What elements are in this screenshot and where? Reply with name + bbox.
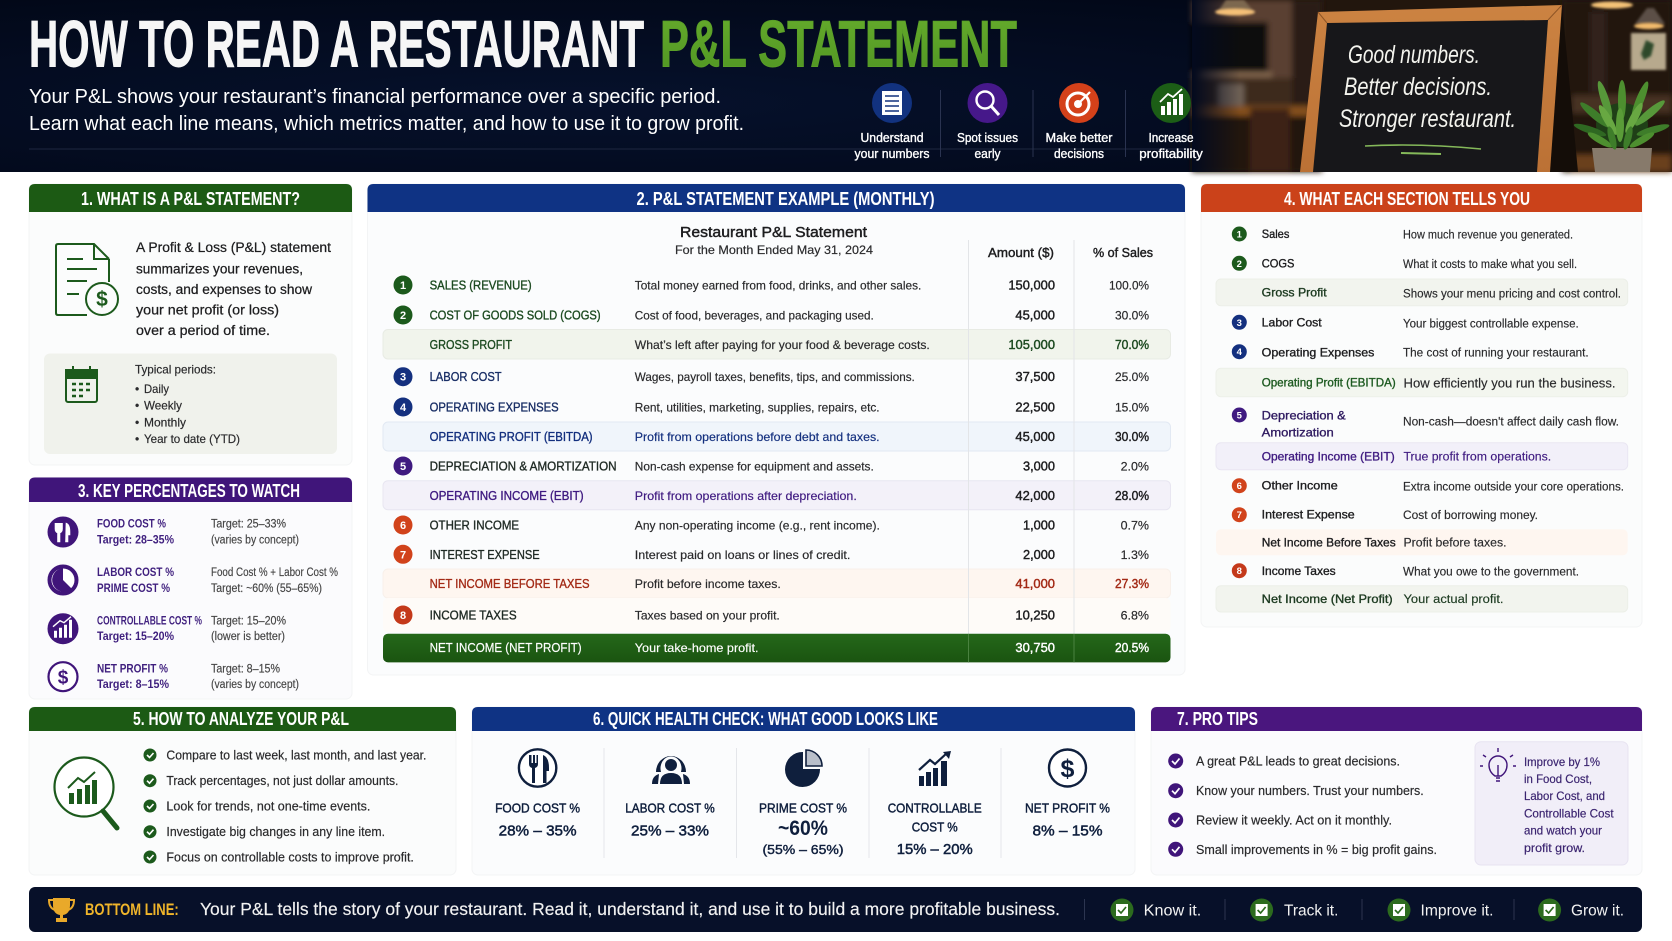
row: operating profit: 30.0% [1115, 430, 1149, 444]
heading [472, 707, 1135, 731]
item: operating income [1262, 450, 1551, 464]
item: other income [1232, 478, 1624, 493]
benefit: understand your numbers: your numbers [854, 147, 930, 161]
metric: prime cost: (55% – 65%) [762, 842, 844, 857]
row: operating expenses: 22,500 [1015, 400, 1055, 414]
item: operating profit [1262, 376, 1616, 390]
item: gross profit [1262, 286, 1621, 300]
row: operating income: OPERATING INCOME (EBIT) [430, 489, 584, 503]
item: sales: 1 [1237, 230, 1243, 240]
item: cogs: 2 [1237, 259, 1242, 270]
item: gross profit: Gross Profit [1262, 286, 1327, 300]
item: interest expense: Cost of borrowing money. [1403, 510, 1538, 522]
row: net income before taxes: NET INCOME BEFORE TAXES [430, 577, 590, 591]
benefit: understand your numbers: Understand [860, 131, 924, 145]
row: net income before taxes: 27.3% [1115, 577, 1149, 591]
icon: dollar circle [48, 662, 78, 691]
metric: food cost: 28% – 35% [499, 823, 577, 840]
row: net income net profit [383, 634, 1170, 662]
item: other income: 6 [1237, 481, 1242, 492]
panel: 6 quick health check [472, 707, 1135, 875]
icon: potted plant [1573, 80, 1670, 172]
typical periods box: Typical periods: [135, 362, 216, 376]
metric: labor and prime cost: LABOR COST % [97, 567, 174, 579]
typical periods box: Monthly [144, 416, 186, 430]
item: net income before taxes: Net Income Before Taxes [1262, 536, 1396, 550]
action: improve it [1388, 898, 1494, 922]
bottom line label: BOTTOM LINE: [85, 900, 179, 919]
icon: growth bars [919, 751, 951, 786]
row: operating profit: OPERATING PROFIT (EBITDA) [430, 430, 593, 444]
row: operating profit [430, 430, 1149, 444]
row: gross profit: GROSS PROFIT [430, 338, 512, 352]
checklist: Track percentages, not just dollar amounts. [166, 774, 398, 788]
item: operating profit: Operating Profit (EBITDA) [1262, 376, 1396, 390]
item: operating income: True profit from operations. [1404, 452, 1551, 464]
metric: net profit: (varies by concept) [211, 679, 299, 691]
callout: Controllable Cost [1524, 806, 1614, 820]
item: net income before taxes [1262, 536, 1506, 550]
icon: dollar circle: $ [1061, 755, 1075, 783]
row: income taxes: 8 [400, 610, 406, 622]
item: sales: How much revenue you generated. [1403, 229, 1573, 241]
row highlights [383, 330, 1170, 632]
action: track it: Track it. [1284, 902, 1338, 920]
typical periods box: Weekly [144, 398, 182, 412]
item: operating profit: How efficiently you run the business. [1404, 376, 1616, 390]
icon: dollar circle: $ [58, 668, 69, 689]
benefit: understand your numbers [854, 83, 930, 161]
icon: team [652, 756, 690, 784]
typical periods box: • [135, 398, 139, 412]
metric: controllable cost: COST % [912, 820, 958, 835]
metric: food cost: Target: 25–33% [211, 518, 286, 530]
header banner [0, 0, 1672, 172]
tips checklist [1168, 754, 1437, 857]
metric: controllable cost: CONTROLLABLE COST % [97, 616, 202, 628]
action: grow it [1538, 898, 1624, 922]
row: other income: OTHER INCOME [430, 518, 519, 532]
row: operating expenses: OPERATING EXPENSES [430, 400, 559, 414]
row: labor cost: 25.0% [1115, 370, 1149, 384]
row: operating expenses: Rent, utilities, marketing, supplies, repairs, etc. [635, 400, 880, 414]
statement title [675, 224, 873, 257]
item: labor cost [1232, 315, 1579, 330]
item: depreciation and amortization: Depreciation & [1262, 409, 1346, 423]
metric: controllable cost: CONTROLLABLE [888, 801, 982, 816]
row: interest expense: 7 [400, 549, 406, 561]
bottom line bar [29, 887, 1642, 932]
bottom line message: Your P&L tells the story of your restaurant. Read it, understand it, and use it to build a more profitable business. [200, 899, 1060, 919]
metric: controllable cost [888, 751, 982, 858]
icon: calendar [66, 366, 97, 402]
row: labor cost: 37,500 [1015, 370, 1055, 384]
row: depreciation: DEPRECIATION & AMORTIZATION [430, 460, 617, 474]
title: HOW TO READ A RESTAURANT [29, 6, 644, 80]
row: interest expense: INTEREST EXPENSE [430, 548, 540, 562]
row: depreciation: 3,000 [1023, 460, 1055, 474]
panel: 5 how to analyze [29, 707, 456, 875]
row: depreciation: Non-cash expense for equipment and assets. [635, 460, 874, 474]
icon: magnifier [968, 83, 1008, 123]
row: sales [394, 276, 1149, 294]
row: cogs: 30.0% [1115, 308, 1149, 322]
tips checklist: Know your numbers. Trust your numbers. [1196, 784, 1424, 798]
column headers [988, 245, 1153, 260]
heading: 7. PRO TIPS [1177, 709, 1258, 729]
row: gross profit: 70.0% [1115, 338, 1149, 352]
heading: 2. P&L STATEMENT EXAMPLE (MONTHLY) [636, 189, 934, 209]
row: labor cost: Wages, payroll taxes, benefits, tips, and commissions. [635, 370, 915, 384]
icon: document list [872, 83, 912, 123]
row: income taxes: INCOME TAXES [430, 608, 517, 622]
icon: document with dollar [56, 244, 118, 315]
typical periods box: • [135, 432, 139, 446]
item: labor cost: Your biggest controllable expense. [1403, 318, 1579, 330]
item: labor cost: Labor Cost [1262, 315, 1322, 329]
item: income taxes [1232, 563, 1579, 578]
row: income taxes: 6.8% [1121, 608, 1149, 622]
metric: net profit: NET PROFIT % [97, 664, 168, 676]
metric: controllable cost: Target: 15–20% [97, 631, 174, 643]
row: labor cost [394, 367, 1149, 386]
heading [29, 478, 352, 502]
row: cogs: 2 [400, 310, 406, 322]
row: cogs: COST OF GOODS SOLD (COGS) [430, 308, 601, 322]
benefit: make better decisions [1046, 83, 1112, 161]
row: gross profit: What’s left after paying for your food & beverage costs. [635, 338, 930, 352]
item: cogs: What it costs to make what you sell. [1403, 259, 1577, 271]
row: income taxes [394, 606, 1149, 624]
metric: food cost: FOOD COST % [97, 518, 166, 530]
definition text [136, 240, 331, 338]
icon: chart [48, 613, 78, 644]
row: operating income: 28.0% [1115, 489, 1149, 503]
icon: pendant lamps [1215, 0, 1666, 70]
metric: net profit [1025, 750, 1110, 840]
metric: prime cost: ~60% [778, 817, 828, 840]
item: income taxes: Income Taxes [1262, 564, 1336, 578]
heading: 1. WHAT IS A P&L STATEMENT? [81, 189, 300, 209]
row: other income: 1,000 [1023, 518, 1055, 532]
metric: controllable cost: 15% – 20% [897, 841, 973, 858]
row: net income before taxes [430, 577, 1149, 591]
item: gross profit: Shows your menu pricing and cost control. [1403, 288, 1621, 300]
benefit: spot issues early: Spot issues [957, 131, 1018, 145]
action: improve it: Improve it. [1420, 902, 1494, 920]
item: income taxes: 8 [1237, 566, 1242, 577]
tips checklist: Small improvements in % = big profit gains. [1196, 843, 1437, 857]
benefit: spot issues early [957, 83, 1018, 161]
subtitle: Learn what each line means, which metrics matter, and how to use it to grow profit. [29, 112, 744, 135]
icon: trophy [49, 898, 74, 922]
definition text: over a period of time. [136, 323, 270, 338]
typical periods box: Daily [144, 382, 169, 396]
icon: clock pie [50, 566, 76, 594]
item: operating expenses [1232, 344, 1589, 360]
metric: food cost: FOOD COST % [495, 801, 581, 816]
tips checklist: Review it weekly. Act on it monthly. [1196, 814, 1392, 828]
heading [29, 184, 352, 212]
icon: lightbulb [1480, 748, 1516, 781]
heading: 5. HOW TO ANALYZE YOUR P&L [133, 709, 349, 729]
row: other income: Any non-operating income (e.g., rent income). [635, 518, 880, 532]
typical periods box: • [135, 382, 139, 396]
metric: prime cost [759, 750, 847, 857]
item: other income: Extra income outside your core operations. [1403, 481, 1624, 493]
item: income taxes: What you owe to the government. [1403, 566, 1579, 578]
benefit: increase profitability: profitability [1139, 147, 1204, 161]
row: other income: 6 [400, 520, 406, 532]
row: cogs: Cost of food, beverages, and packaging used. [635, 308, 874, 322]
item: depreciation and amortization: Non-cash—doesn't affect daily cash flow. [1403, 417, 1619, 429]
metric: net profit: Target: 8–15% [97, 679, 169, 691]
row: cogs: 45,000 [1015, 308, 1055, 322]
chalk text: Better decisions. [1344, 73, 1492, 101]
row: operating income [430, 489, 1149, 503]
action: know it [1110, 898, 1201, 922]
checklist: Look for trends, not one-time events. [166, 800, 370, 814]
callout: and watch your [1524, 824, 1602, 838]
heading [1201, 184, 1642, 212]
row: depreciation: 5 [400, 461, 406, 473]
heading [1151, 707, 1642, 731]
heading [368, 184, 1185, 212]
row: net income before taxes: Profit before income taxes. [635, 577, 781, 591]
row: interest expense [394, 545, 1149, 564]
metric: labor and prime cost [50, 566, 338, 595]
item: sales [1232, 226, 1573, 242]
row: net income net profit: NET INCOME (NET PROFIT) [430, 641, 582, 655]
row: gross profit [430, 338, 1149, 352]
row: labor cost: LABOR COST [430, 370, 502, 384]
item: operating expenses: Operating Expenses [1262, 345, 1374, 359]
tips checklist: A great P&L leads to great decisions. [1196, 754, 1400, 768]
icon: magnifier with chart [54, 758, 117, 828]
item: net income [1262, 592, 1504, 606]
item: depreciation and amortization: Amortization [1262, 426, 1334, 440]
metric: labor cost: LABOR COST % [625, 801, 715, 816]
column headers: Amount ($) [988, 245, 1054, 260]
item: interest expense: 7 [1237, 510, 1242, 521]
typical periods box: • [135, 416, 139, 430]
heading: 6. QUICK HEALTH CHECK: WHAT GOOD LOOKS LIKE [593, 709, 938, 729]
metric: food cost: Target: 28–35% [97, 534, 174, 546]
item: labor cost: 3 [1237, 318, 1242, 329]
metric: food cost [495, 749, 581, 840]
benefit: increase profitability [1139, 83, 1204, 161]
row: net income net profit: Your take-home profit. [635, 641, 758, 655]
metric: labor and prime cost: Target: ~60% (55–65%) [211, 583, 322, 595]
metric: labor and prime cost: PRIME COST % [97, 583, 170, 595]
item: net income: Your actual profit. [1404, 594, 1504, 606]
column headers: % of Sales [1093, 245, 1153, 260]
row: gross profit: 105,000 [1008, 338, 1055, 352]
definition text: your net profit (or loss) [136, 302, 279, 318]
row: operating expenses [394, 398, 1149, 416]
callout: Labor Cost, and [1524, 789, 1605, 803]
item: sales: Sales [1262, 227, 1289, 241]
panel: 2 P&L statement example [368, 184, 1185, 675]
metric: controllable cost [48, 613, 286, 644]
metric: labor cost [625, 756, 715, 840]
panel: 7 pro tips [1151, 707, 1642, 875]
item: depreciation and amortization [1232, 408, 1619, 440]
checklist: Investigate big changes in any line item. [166, 825, 385, 839]
subtitle [29, 85, 744, 135]
row: other income [394, 516, 1149, 534]
benefit: make better decisions: decisions [1054, 147, 1104, 161]
section highlights [1216, 279, 1628, 612]
definition text: costs, and expenses to show [136, 282, 312, 297]
statement title: For the Month Ended May 31, 2024 [675, 243, 873, 257]
metric: food cost [48, 516, 299, 548]
row: other income: 0.7% [1121, 518, 1149, 532]
row: operating profit: 45,000 [1015, 430, 1055, 444]
chalk text: Stronger restaurant. [1339, 105, 1516, 133]
row: operating expenses: 4 [400, 402, 407, 414]
restaurant photo background [1192, 0, 1672, 172]
definition text: summarizes your revenues, [136, 262, 303, 276]
heading: 3. KEY PERCENTAGES TO WATCH [78, 481, 300, 501]
metric: controllable cost: Target: 15–20% [211, 616, 286, 628]
action: know it: Know it. [1144, 902, 1201, 920]
row: depreciation [394, 456, 1149, 476]
panel: 4 what each section tells you [1201, 184, 1642, 627]
row: sales: 1 [400, 280, 406, 292]
row: cogs [394, 306, 1149, 324]
row: net income net profit: 20.5% [1115, 641, 1149, 655]
row: net income net profit: 30,750 [1015, 641, 1055, 655]
item: operating expenses: 4 [1237, 347, 1243, 358]
subtitle: Your P&L shows your restaurant’s financial performance over a specific period. [29, 85, 721, 108]
metric: food cost: (varies by concept) [211, 534, 299, 546]
row: interest expense: 2,000 [1023, 548, 1055, 562]
chalkboard sign [1300, 5, 1578, 172]
icon: document with dollar: $ [96, 288, 108, 311]
item: depreciation and amortization: 5 [1237, 410, 1243, 422]
metric: controllable cost: (lower is better) [211, 631, 285, 643]
item: other income: Other Income [1262, 479, 1338, 493]
row: operating profit: Profit from operations before debt and taxes. [635, 430, 880, 444]
callout: Improve by 1% [1524, 755, 1600, 769]
row: sales: SALES (REVENUE) [430, 278, 532, 292]
callout: in Food Cost, [1524, 772, 1592, 786]
row: income taxes: 10,250 [1015, 608, 1055, 622]
row: operating expenses: 15.0% [1115, 400, 1149, 414]
icon: fork and knife [48, 516, 78, 548]
metric: net profit: 8% – 15% [1032, 823, 1102, 840]
row: labor cost: 3 [400, 372, 406, 384]
metric: net profit: Target: 8–15% [211, 664, 280, 676]
row: operating income: Profit from operations after depreciation. [635, 489, 857, 503]
title: P&L STATEMENT [660, 6, 1017, 80]
metric: net profit [48, 662, 299, 691]
item: operating expenses: The cost of running your restaurant. [1403, 348, 1589, 360]
row: net income before taxes: 41,000 [1015, 577, 1055, 591]
benefit: increase profitability: Increase [1148, 131, 1194, 145]
panel: 1 what is a P&L statement [29, 184, 352, 465]
chalk text [1339, 41, 1516, 133]
action: grow it: Grow it. [1571, 902, 1624, 920]
definition text: A Profit & Loss (P&L) statement [136, 240, 331, 255]
checklist: Focus on controllable costs to improve profit. [166, 850, 414, 864]
heading [29, 707, 456, 731]
typical periods box [44, 354, 337, 454]
callout [1475, 742, 1628, 865]
row: sales: 100.0% [1109, 278, 1149, 292]
checklist [144, 748, 426, 864]
icon: pie chart [785, 750, 822, 787]
row: sales: 150,000 [1008, 278, 1055, 292]
item: operating income: Operating Income (EBIT) [1262, 450, 1395, 464]
metric: labor and prime cost: Food Cost % + Labor Cost % [211, 567, 338, 579]
row: interest expense: Interest paid on loans or lines of credit. [635, 548, 850, 562]
row: income taxes: Taxes based on your profit. [635, 608, 780, 622]
benefit: spot issues early: early [974, 147, 1001, 161]
typical periods box: Year to date (YTD) [144, 432, 240, 446]
icon: target [1059, 83, 1099, 123]
chalk text: Good numbers. [1348, 41, 1480, 69]
row: depreciation: 2.0% [1121, 460, 1149, 474]
item: interest expense [1232, 507, 1538, 522]
metric: net profit: NET PROFIT % [1025, 801, 1110, 816]
action: track it [1250, 898, 1338, 922]
row: interest expense: 1.3% [1121, 548, 1149, 562]
icon: growth chart [1151, 83, 1191, 123]
metric: labor cost: 25% – 33% [631, 823, 709, 840]
item: net income before taxes: Profit before taxes. [1404, 538, 1506, 550]
statement title: Restaurant P&L Statement [680, 224, 868, 241]
callout: profit grow. [1524, 841, 1585, 855]
row: sales: Total money earned from food, drinks, and other sales. [635, 278, 921, 292]
row: operating income: 42,000 [1015, 489, 1055, 503]
heading: 4. WHAT EACH SECTION TELLS YOU [1284, 189, 1530, 209]
checklist: Compare to last week, last month, and last year. [166, 748, 426, 762]
item: net income: Net Income (Net Profit) [1262, 592, 1393, 606]
panel: 3 key percentages [29, 478, 352, 699]
metric: prime cost: PRIME COST % [759, 801, 847, 816]
item: cogs [1232, 256, 1577, 271]
benefit: make better decisions: Make better [1046, 131, 1112, 145]
icon: fork and knife [519, 749, 556, 787]
item: cogs: COGS [1262, 256, 1294, 270]
item: interest expense: Interest Expense [1262, 508, 1355, 522]
